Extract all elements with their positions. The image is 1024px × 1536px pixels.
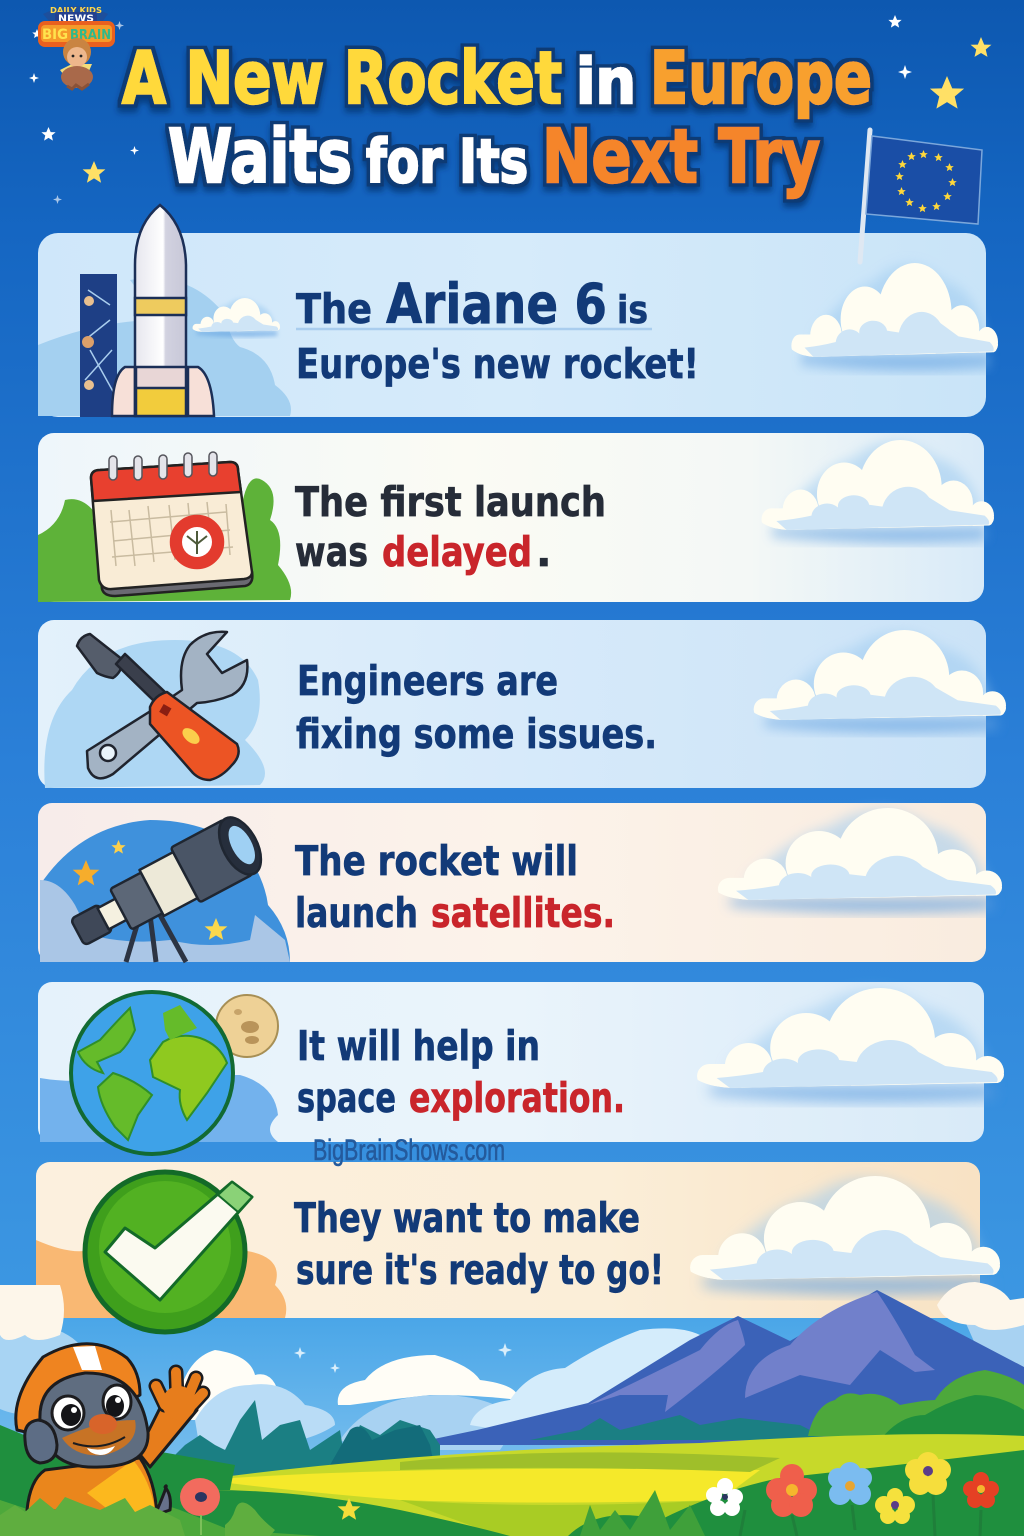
panel 1: Ariane 6 <box>38 205 998 417</box>
panel 3 text <box>296 657 657 758</box>
cloud <box>762 440 994 542</box>
mountains <box>405 1290 1024 1445</box>
background stars <box>29 15 991 204</box>
logo: Daily Kids News with Big Brain <box>38 6 115 89</box>
panel 2 text: was <box>295 528 368 576</box>
logo: Daily Kids News with Big Brain: BIG <box>42 27 68 43</box>
panel 5: exploration <box>38 982 1004 1154</box>
logo: Daily Kids News with Big Brain: BRAIN <box>70 28 111 43</box>
green bush <box>38 478 291 602</box>
panel 5 text: space <box>297 1074 396 1122</box>
orange backdrop <box>36 1240 286 1318</box>
panel 1 text: is <box>617 288 648 332</box>
stars <box>73 840 227 940</box>
panel 4 text: The rocket will <box>295 837 578 885</box>
panel 5 text: It will help in <box>297 1022 540 1070</box>
title: Europe <box>650 36 872 120</box>
logo: Daily Kids News with Big Brain: DAILY KIDS <box>50 6 102 15</box>
blue sky dome <box>40 820 290 962</box>
panel 1 text: Ariane 6 <box>386 272 607 336</box>
panel 2 text: . <box>536 528 552 576</box>
left cloud backdrop <box>38 278 291 416</box>
title: in <box>576 45 636 118</box>
telescope <box>63 811 270 962</box>
cloud large <box>791 263 998 369</box>
panel 6: ready <box>36 1162 1000 1318</box>
panel 4 text: launch <box>295 889 418 937</box>
panel 2 text: delayed <box>382 528 532 576</box>
cloud <box>754 630 1006 732</box>
launch tower <box>80 274 117 417</box>
earth <box>71 992 233 1154</box>
panel 6 text: They want to make <box>294 1194 640 1242</box>
panel 1 text: Europe's new rocket! <box>296 340 699 388</box>
meadow <box>200 1434 1024 1536</box>
panel 2 text <box>295 478 606 576</box>
panel 2: delay <box>38 433 994 602</box>
panel 1 text <box>296 272 699 388</box>
cloud small <box>193 298 280 336</box>
cloud <box>697 988 1004 1101</box>
calendar icon <box>91 452 252 596</box>
title: A New Rocket <box>122 36 562 120</box>
panel 5 text <box>297 1022 625 1122</box>
logo: Daily Kids News with Big Brain: NEWS <box>58 14 94 24</box>
mascot: waving mole in helmet <box>16 1344 203 1515</box>
wrench and screwdriver icon <box>77 632 247 780</box>
panel 3 text: fixing some issues. <box>296 710 657 758</box>
blue backdrop <box>40 1075 278 1142</box>
title: Next Try <box>542 114 820 200</box>
green hills <box>0 1425 510 1536</box>
panel 3: engineers <box>38 620 1006 788</box>
moon <box>216 995 278 1057</box>
panel 5 text: exploration. <box>409 1074 625 1122</box>
panel 4: satellites <box>38 803 1002 962</box>
grass and foreground flowers <box>0 1452 999 1536</box>
title: Waits <box>168 114 352 200</box>
cloud <box>690 1176 1000 1294</box>
title: for Its <box>366 127 528 197</box>
title <box>122 36 872 200</box>
panel 2 text: The first launch <box>295 478 606 526</box>
tree line <box>150 1400 440 1480</box>
panel 1 text: The <box>296 285 372 333</box>
panel 4 text: satellites. <box>431 889 615 937</box>
cloud <box>718 808 1002 912</box>
website watermark: BigBrainShows.com <box>313 1134 505 1167</box>
EU flag <box>860 130 982 262</box>
blue backdrop <box>44 640 265 788</box>
bottom scene: sky, clouds, mountains, meadow <box>0 1282 1024 1536</box>
panel 6 text: sure it's ready to go! <box>296 1246 664 1294</box>
green bushes right <box>808 1370 1024 1440</box>
panel 6 text <box>294 1194 664 1294</box>
panel 4 text <box>295 837 615 937</box>
rocket <box>112 205 214 416</box>
panel 3 text: Engineers are <box>297 657 558 705</box>
check badge <box>85 1172 252 1332</box>
